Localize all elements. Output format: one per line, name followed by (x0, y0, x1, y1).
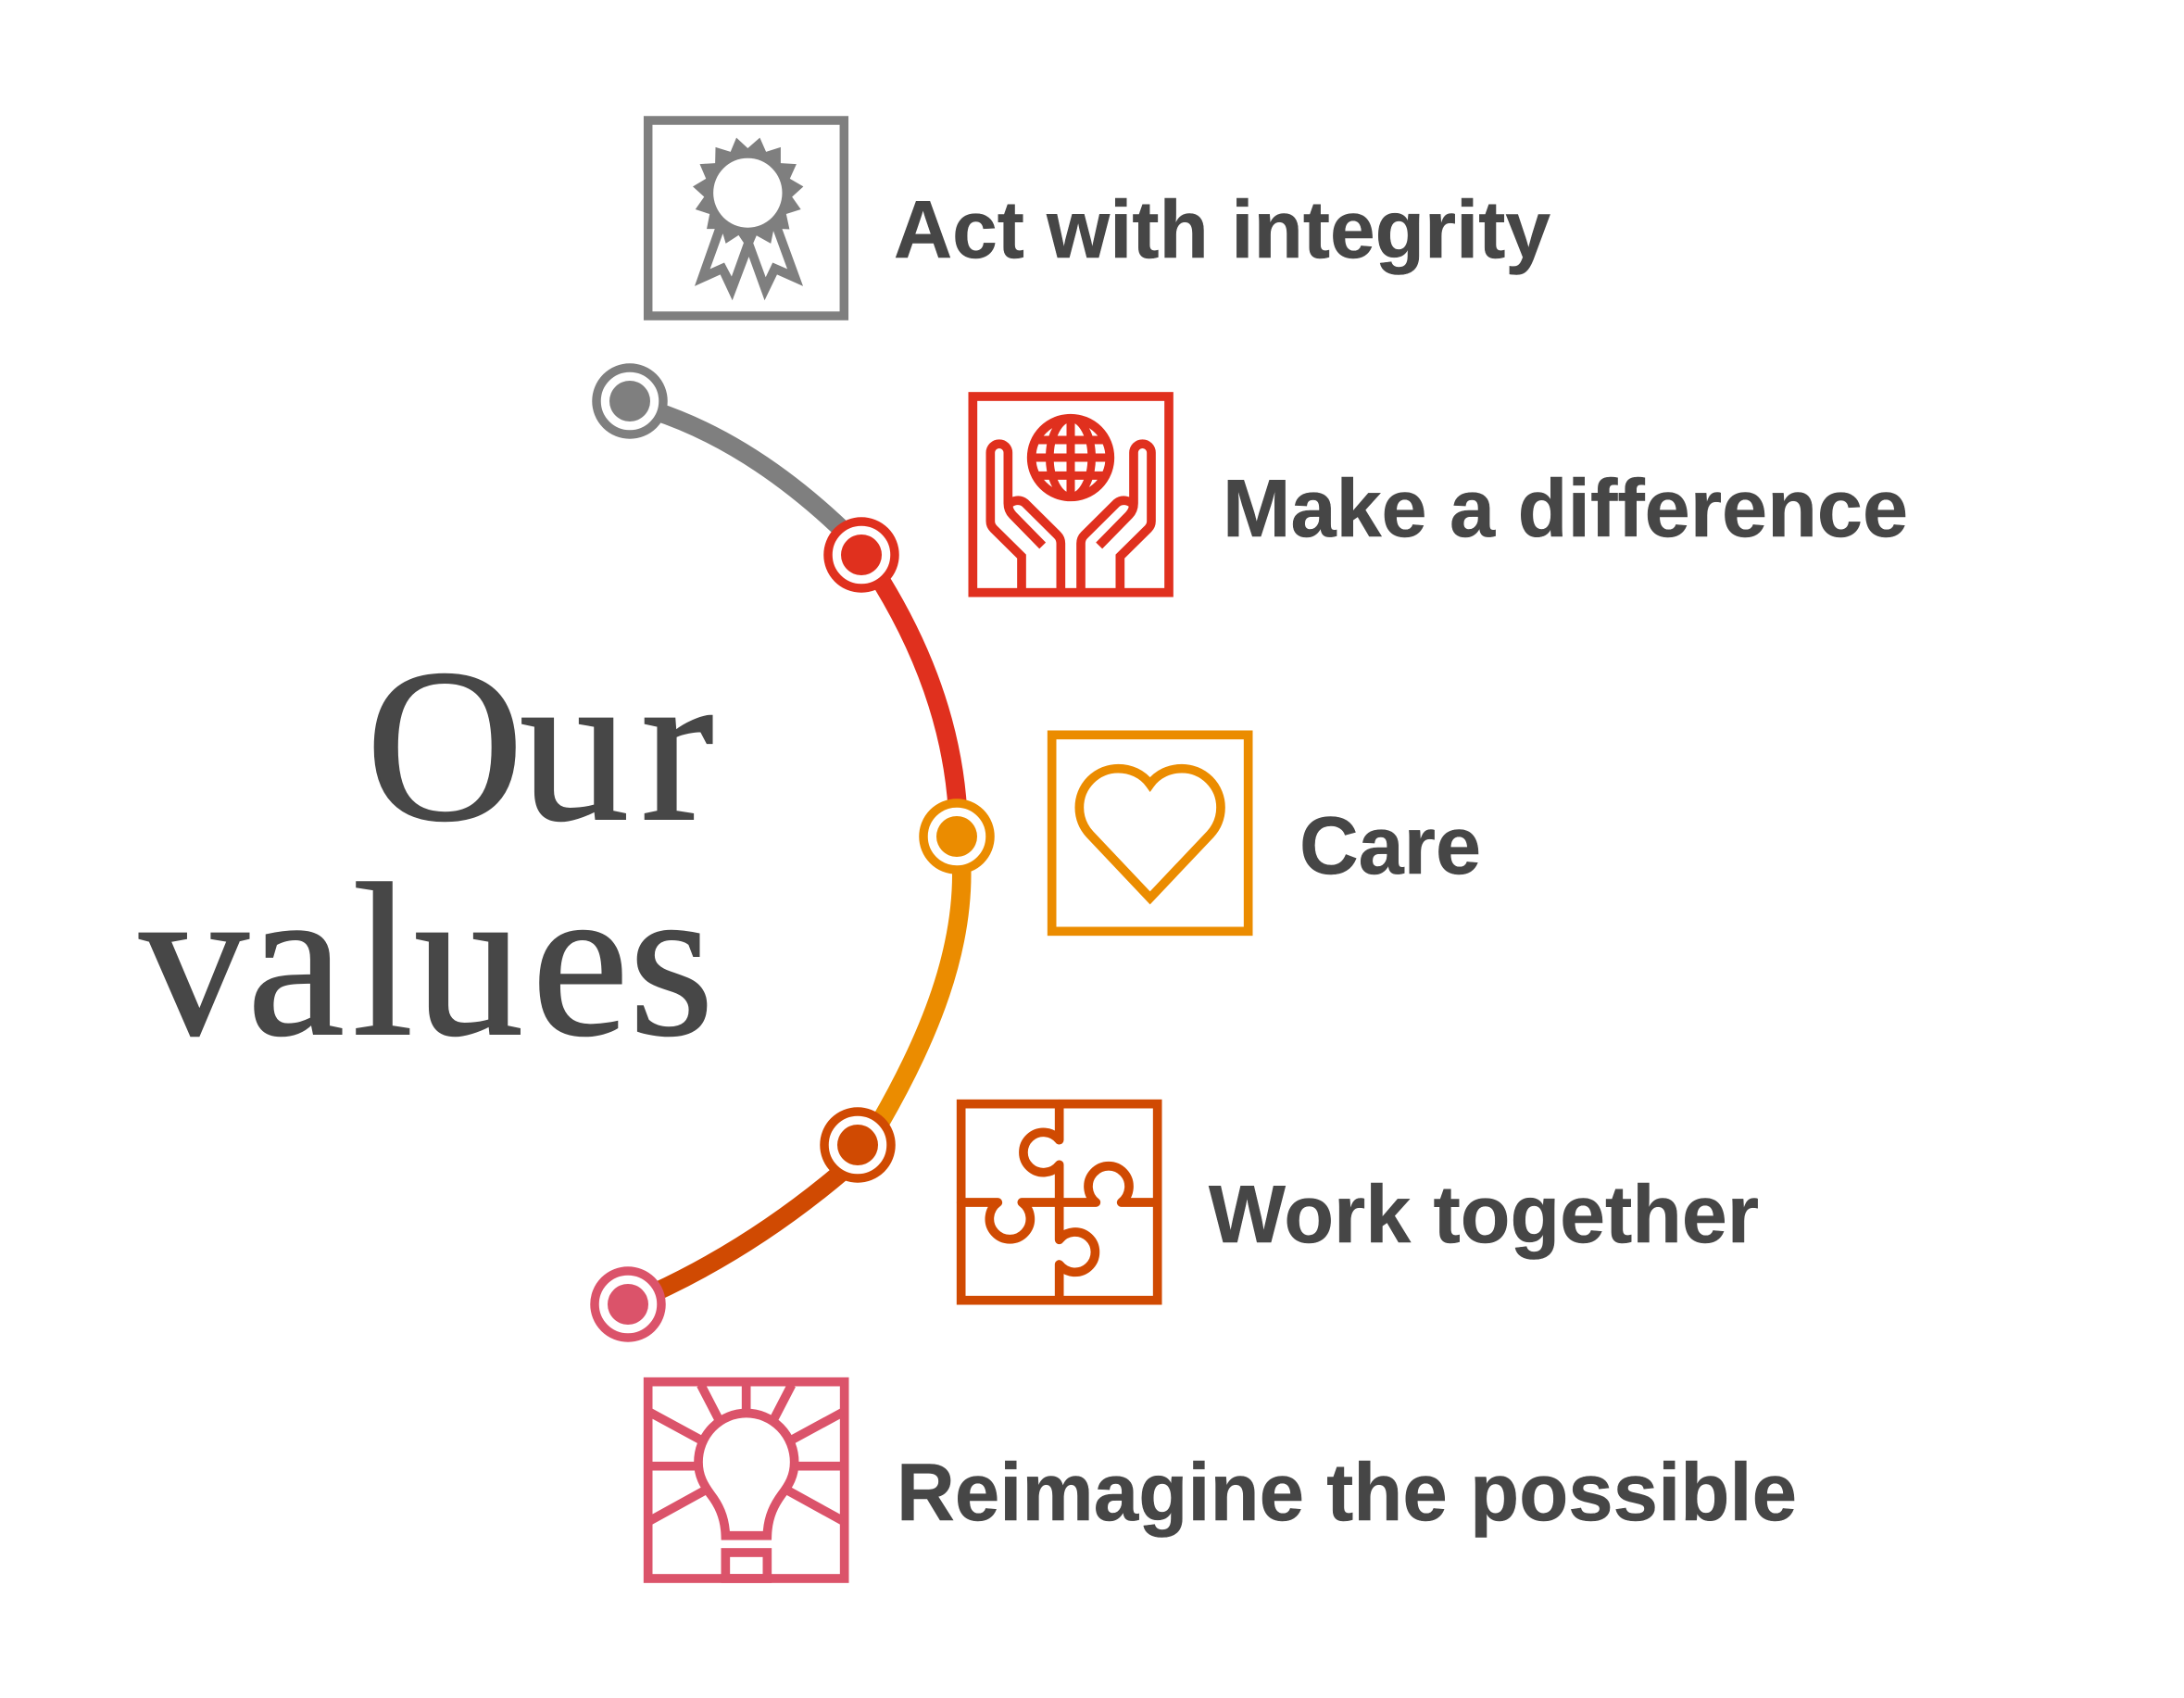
title: Our values (139, 625, 714, 1082)
title: Our values: values (139, 840, 714, 1082)
arc segment: orange (880, 862, 961, 1123)
icon: award rosette (648, 120, 844, 316)
icon: light bulb (648, 1382, 845, 1579)
arc segment: dark orange (653, 1167, 847, 1293)
label: Work together: Work together (1209, 1168, 1759, 1260)
node: red (828, 522, 895, 588)
arc segment: grey (653, 410, 852, 539)
icon: puzzle pieces (961, 1104, 1158, 1301)
node: grey (596, 368, 663, 434)
curved timeline (595, 368, 990, 1338)
icon: hands holding globe (973, 396, 1169, 593)
node: dark orange (824, 1112, 891, 1178)
node: pink (595, 1271, 661, 1338)
label: Reimagine the possible: Reimagine the possible (897, 1446, 1797, 1538)
label: Care: Care (1299, 799, 1481, 891)
title: Our values: Our (366, 625, 714, 867)
label: Act with integrity: Act with integrity (894, 183, 1550, 275)
icon: heart (1052, 735, 1249, 931)
node: orange (923, 803, 990, 870)
label: Make a difference: Make a difference (1223, 462, 1908, 554)
arc segment: red (878, 576, 958, 811)
